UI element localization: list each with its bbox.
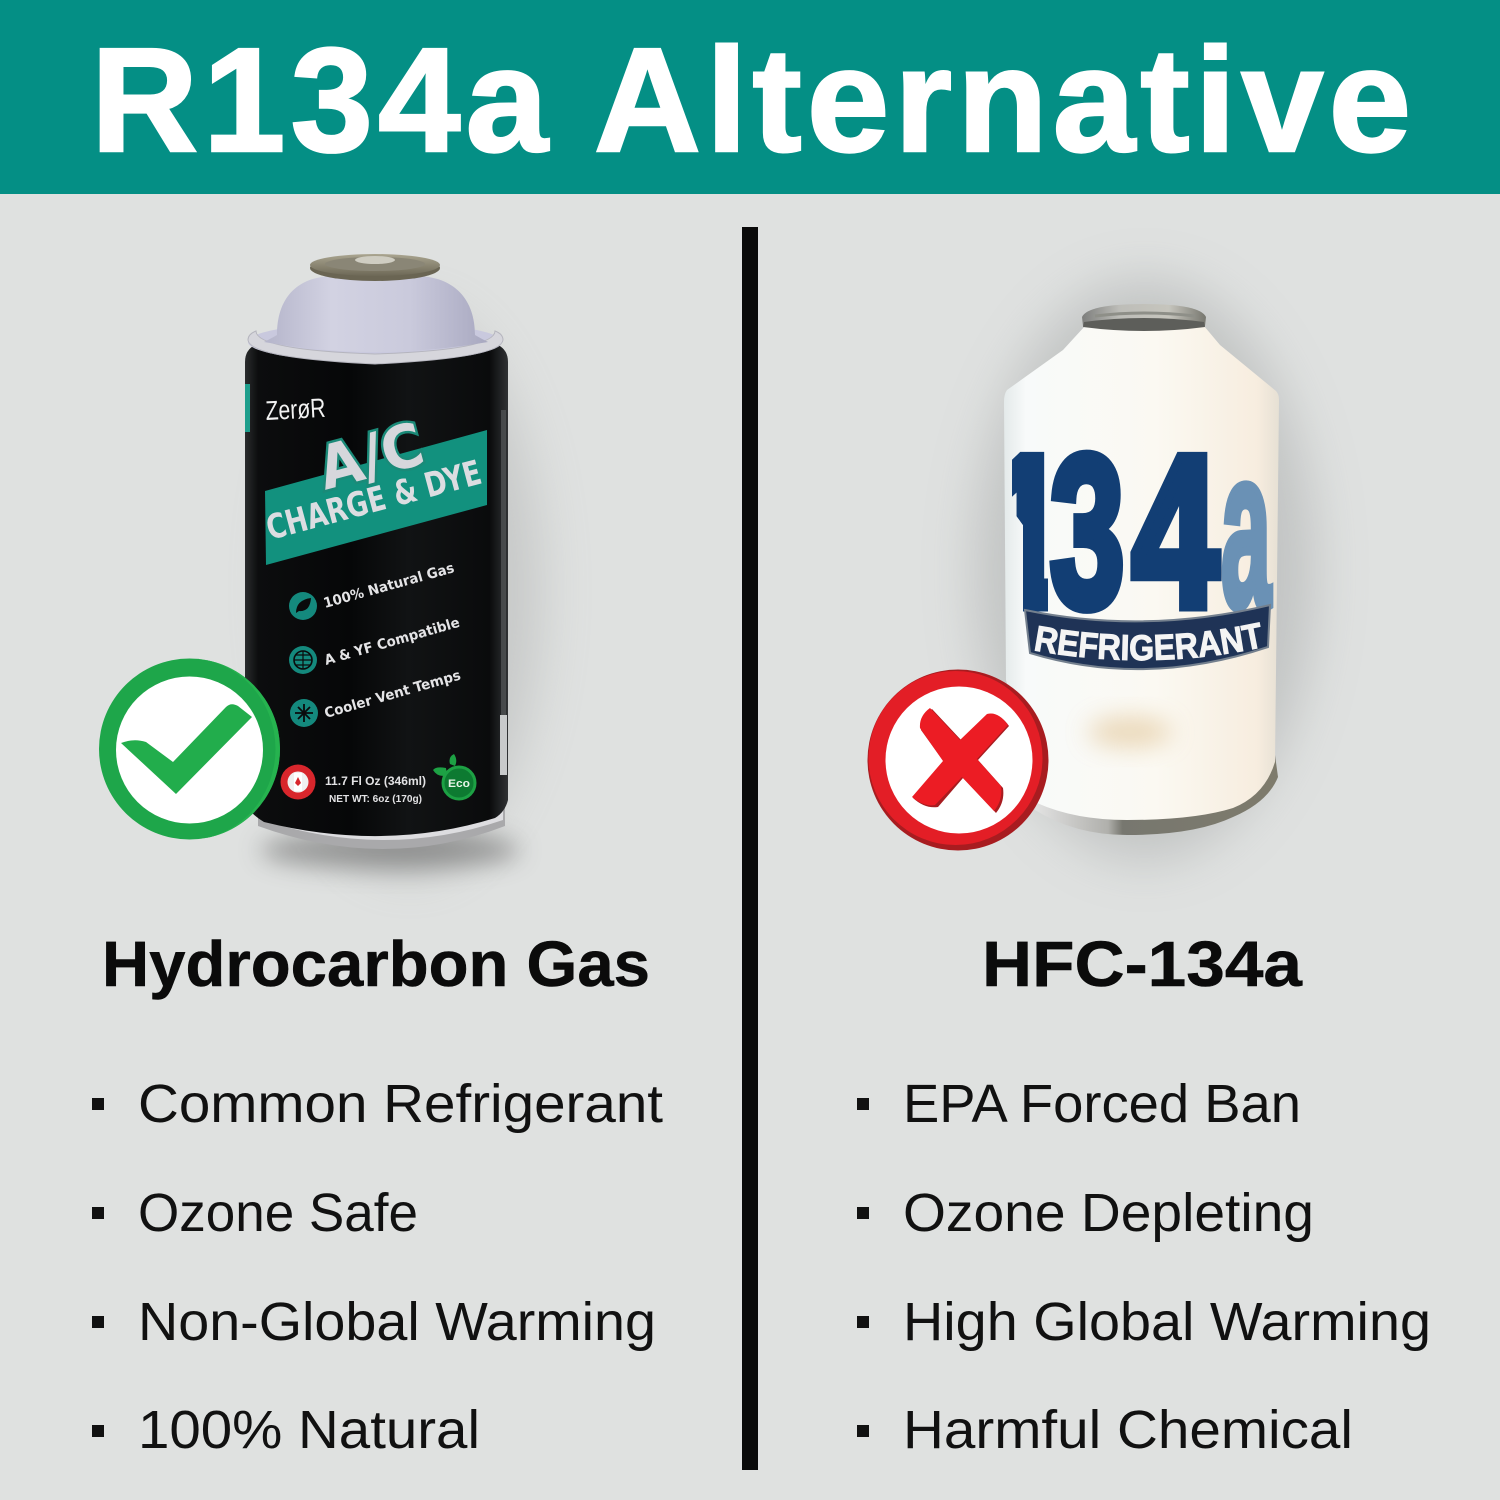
can net weight: NET WT: 6oz (170g) [329,794,422,805]
can feature text: 100% Natural Gas [322,560,456,612]
panel: hydrocarbon gas [92,254,663,1460]
can feature text [322,560,463,722]
product: ZeroR can [245,254,540,870]
product: 134a can [961,268,1329,872]
can feature text: Cooler Vent Temps [323,668,463,722]
list: hydrocarbon benefits: 100% Natural [138,1400,480,1460]
heading: hydrocarbon gas: Hydrocarbon Gas [102,928,650,1000]
badge: eco friendly: Eco [448,778,470,790]
title: R134a Alternative [91,18,1411,183]
can net weight: 11.7 Fl Oz (346ml) [325,776,426,788]
can stain [1088,716,1172,748]
list: hydrocarbon benefits: Common Refrigerant [138,1074,663,1134]
can label A/C: A/C [311,409,431,504]
badge: eco friendly [433,754,475,799]
badge: made in Canada [280,764,316,800]
list: hydrocarbon benefits: Ozone Safe [138,1183,418,1243]
can number 134: 3 [1050,411,1124,653]
list: HFC-134a drawbacks: Harmful Chemical [903,1400,1353,1460]
title banner [0,0,1500,194]
can number 134: 4 [1132,411,1218,652]
center divider [742,227,758,1470]
heading: HFC-134a: HFC-134a [982,928,1302,1000]
can refrigerant band: REFRIGERANT [1034,622,1261,661]
can number 134: 1 [986,412,1068,653]
icon: green check badge [99,658,280,840]
product: 134a can: a [1221,402,1272,654]
can label charge and dye: CHARGE & DYE [262,453,486,549]
list: HFC-134a drawbacks: Ozone Depleting [903,1183,1314,1243]
can top rim [1082,304,1206,331]
list: HFC-134a drawbacks [857,1074,1431,1460]
can net weight [325,776,426,805]
can feature text: A & YF Compatible [323,615,462,669]
icon: red cross badge [868,670,1048,850]
can label banner [265,430,487,565]
list: HFC-134a drawbacks: High Global Warming [903,1292,1431,1352]
can logo: ZerøR [265,393,326,426]
list: HFC-134a drawbacks: EPA Forced Ban [903,1074,1301,1134]
can number 134 [1012,450,1222,614]
list: hydrocarbon benefits [92,1074,663,1460]
panel: HFC-134a [857,268,1431,1460]
can feature icons [289,592,318,727]
list: hydrocarbon benefits: Non-Global Warming [138,1292,656,1352]
